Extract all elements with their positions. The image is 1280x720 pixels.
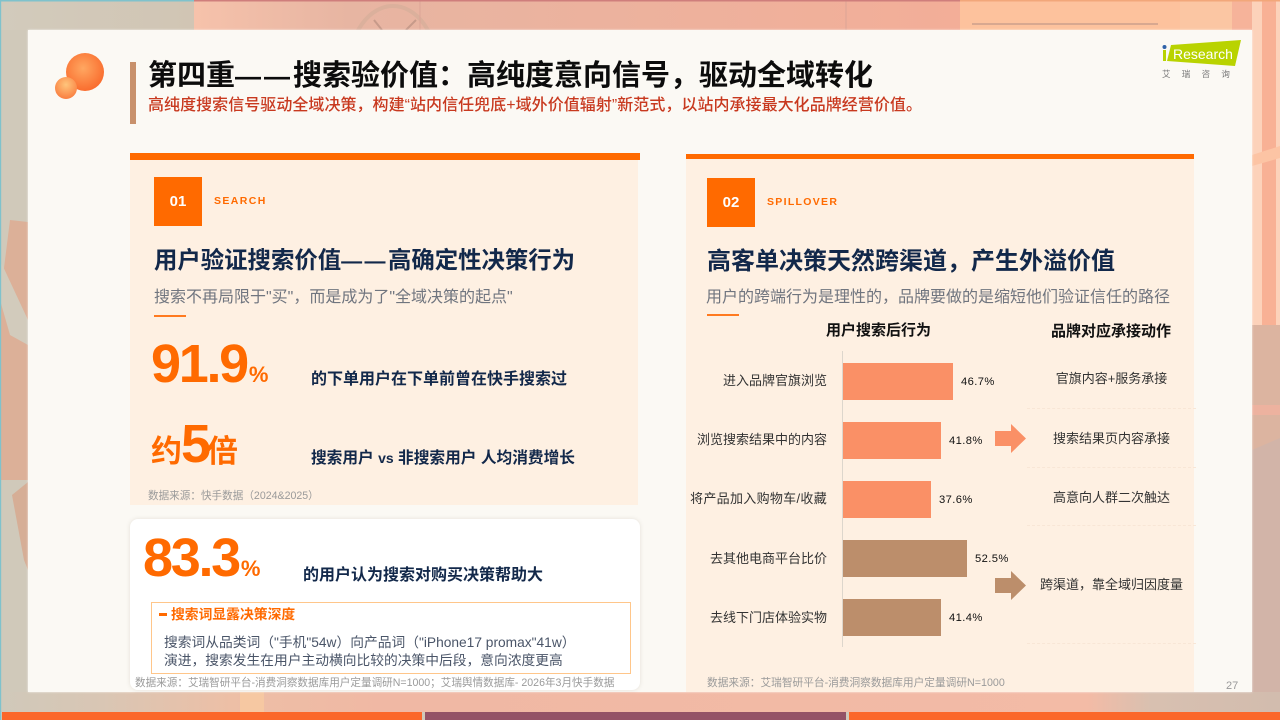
panel top bar [686, 154, 1194, 159]
title accent bar [130, 62, 136, 124]
label spillover: SPILLOVER [767, 196, 838, 208]
stat 83.3%: 83.3% [143, 528, 260, 588]
stat 91.9%: 91.9% [151, 334, 268, 394]
panel background [130, 153, 638, 505]
subtitle: 高纯度搜索信号驱动全域决策，构建“站内信任兜底+域外价值辐射”新范式，以站内承接最大化品牌经营价值。 [148, 97, 922, 114]
stat text: 搜索用户 vs 非搜索用户 人均消费增长 [311, 450, 575, 467]
bar: add to cart: 37.6% [939, 494, 973, 506]
bar: visit offline store: 去线下门店体验实物 [710, 610, 827, 625]
action: flagship: 官旗内容+服务承接 [1056, 371, 1167, 386]
bar: search results: 浏览搜索结果中的内容 [697, 432, 827, 447]
badge 01 [154, 177, 202, 226]
bar chart [690, 351, 1009, 647]
bar: brand flagship: 46.7% [961, 376, 995, 388]
action: search page: 搜索结果页内容承接 [1053, 431, 1170, 446]
panel: spillover [686, 154, 1194, 692]
badge 02: 02 [723, 194, 739, 211]
label search: SEARCH [214, 195, 267, 207]
panel background [686, 154, 1194, 692]
bar: compare on other platforms [710, 540, 1009, 577]
bar: search results: 41.8% [949, 435, 983, 447]
description: 用户的跨端行为是理性的，品牌要做的是缩短他们验证信任的路径 [706, 289, 1170, 306]
stat 5x: 约5倍 [151, 414, 238, 474]
badge 01: 01 [170, 193, 186, 210]
heading: 用户验证搜索价值——高确定性决策行为 [154, 247, 575, 273]
bottom stripe bar [2, 712, 1280, 720]
short rule [707, 314, 739, 316]
icon: orange orbs [55, 53, 104, 99]
short rule [154, 315, 186, 317]
title: 第四重——搜索验价值：高纯度意向信号，驱动全域转化 [148, 60, 873, 92]
bar: compare on other platforms: 去其他电商平台比价 [710, 551, 827, 566]
bar: add to cart [690, 481, 973, 518]
arrow: orange [995, 424, 1026, 453]
panel top bar [130, 153, 640, 160]
callout [151, 602, 631, 674]
callout mark [159, 613, 167, 616]
icon: iResearch logo: 艾瑞咨询 [1162, 69, 1241, 79]
bar: add to cart: 将产品加入购物车/收藏 [690, 491, 827, 506]
panel: search [130, 153, 640, 505]
chart heading: 用户搜索后行为 [826, 322, 931, 339]
action column heading: 品牌对应承接动作 [1051, 323, 1171, 340]
bar: compare on other platforms: 52.5% [975, 553, 1009, 565]
callout body [164, 635, 576, 668]
action list [1040, 371, 1183, 592]
bar: brand flagship: 进入品牌官旗浏览 [723, 373, 827, 388]
callout heading: 搜索词显露决策深度 [171, 607, 295, 622]
badge 02 [707, 178, 755, 227]
action: retargeting: 高意向人群二次触达 [1053, 490, 1170, 505]
stat text: 的下单用户在下单前曾在快手搜索过 [311, 371, 567, 388]
description: 搜索不再局限于"买"，而是成为了"全域决策的起点" [154, 289, 513, 306]
callout body: 搜索词从品类词（"手机"54w）向产品词（"iPhone17 promax"41w） [164, 635, 576, 650]
icon: iResearch logo [1162, 40, 1241, 79]
bar: search results [697, 422, 983, 459]
source: 数据来源：快手数据（2024&2025） [148, 490, 319, 502]
bar: visit offline store [710, 599, 983, 636]
action: cross channel: 跨渠道，靠全域归因度量 [1040, 577, 1183, 592]
icon: iResearch logo: Research [1173, 46, 1233, 62]
callout body: 演进，搜索发生在用户主动横向比较的决策中后段，意向浓度更高 [164, 653, 563, 668]
arrow: brown [995, 571, 1026, 600]
source: 数据来源：艾瑞智研平台-消费洞察数据库用户定量调研N=1000；艾瑞舆情数据库- 2026年3月快手数据 [135, 677, 614, 689]
source: 数据来源：艾瑞智研平台-消费洞察数据库用户定量调研N=1000 [707, 677, 1005, 689]
heading: 高客单决策天然跨渠道，产生外溢价值 [707, 248, 1115, 275]
stat text: 的用户认为搜索对购买决策帮助大 [303, 567, 543, 584]
page number: 27 [1226, 680, 1238, 692]
panel: decision help [130, 519, 640, 690]
chart axis [842, 351, 843, 647]
bar: visit offline store: 41.4% [949, 612, 983, 624]
bar: brand flagship [723, 363, 995, 400]
